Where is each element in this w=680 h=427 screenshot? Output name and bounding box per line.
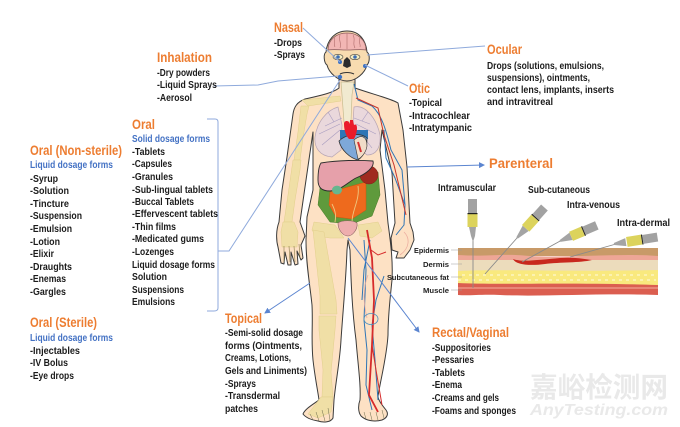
- text block: oral sterile: -Eye drops: [30, 371, 74, 382]
- text block: oral sterile: -Injectables: [30, 346, 80, 357]
- left hand detail: [284, 244, 300, 262]
- connector: inhalation: [214, 76, 338, 86]
- airways: [319, 112, 376, 148]
- blood vessels: blue: [354, 84, 405, 410]
- intestines: orange small bowel: [329, 182, 366, 219]
- text block: oral sterile: -IV Bolus: [30, 358, 68, 369]
- text block: nasal: Nasal: [274, 20, 303, 35]
- bowel folds: [332, 186, 358, 222]
- text block: inhalation: -Liquid Sprays: [157, 80, 217, 91]
- watermark: AnyTesting.com: [529, 402, 668, 419]
- pelvis and left leg bones: [308, 222, 382, 418]
- text block: inhalation: [157, 50, 217, 104]
- heart: [339, 120, 368, 160]
- face: [333, 54, 367, 79]
- text block: ocular: Ocular: [487, 42, 523, 57]
- text block: oral non-sterile: -Syrup: [30, 174, 58, 185]
- text block: ocular: contact lens, implants, inserts: [487, 85, 614, 96]
- liver: [318, 160, 373, 191]
- text block: oral sterile: Liquid dosage forms: [30, 333, 113, 344]
- text block: oral non-sterile: -Lotion: [30, 237, 60, 248]
- text block: oral non-sterile: -Solution: [30, 186, 69, 197]
- text block: oral non-sterile: Oral (Non-sterile): [30, 143, 122, 158]
- text block: inhalation: Inhalation: [157, 50, 212, 65]
- syringe: intra-dermal: [570, 232, 658, 257]
- text block: topical: forms (Ointments,: [225, 341, 302, 352]
- arrow: rectal vaginal: [348, 238, 419, 332]
- text block: rectal vaginal: -Suppositories: [432, 343, 491, 354]
- text block: otic: -Intracochlear: [409, 111, 470, 122]
- text block: oral: Emulsions: [132, 297, 175, 308]
- text block: rectal vaginal: -Creams and gels: [432, 393, 499, 404]
- skin layer labels: Subcutaneous fat: [387, 273, 449, 282]
- text block: oral sterile: [30, 315, 113, 382]
- syringe: intramuscular: [468, 199, 478, 288]
- connector: ocular: [367, 46, 485, 55]
- arrow: parenteral: [407, 165, 484, 167]
- body silhouette: [277, 78, 414, 422]
- skin layer labels: Muscle: [423, 286, 449, 295]
- text block: ocular: and intravitreal: [487, 97, 553, 108]
- knee vessels: [364, 314, 378, 324]
- text block: rectal vaginal: Rectal/Vaginal: [432, 325, 509, 340]
- connector: oral bracket: [207, 80, 340, 311]
- text block: oral: -Tablets: [132, 147, 165, 158]
- connector: nasal: [303, 28, 340, 62]
- text block: topical: -Semi-solid dosage: [225, 328, 304, 339]
- text block: oral non-sterile: -Emulsion: [30, 224, 72, 235]
- arrow: topical: [265, 283, 310, 313]
- skin layer labels: [387, 246, 449, 295]
- text block: ocular: Drops (solutions, emulsions,: [487, 61, 604, 72]
- gallbladder: [332, 186, 342, 194]
- text block: oral: -Buccal Tablets: [132, 197, 194, 208]
- injection type labels: Intra-dermal: [617, 218, 670, 229]
- text block: oral: Oral: [132, 117, 155, 132]
- intestines: green colon: [318, 172, 380, 224]
- skin layer leader lines: [451, 250, 462, 290]
- text block: topical: Creams, Lotions,: [225, 353, 291, 364]
- text block: oral non-sterile: -Gargles: [30, 287, 66, 298]
- text block: oral: [132, 117, 218, 308]
- text block: oral: Solid dosage forms: [132, 134, 210, 145]
- text block: otic: [409, 81, 473, 134]
- text block: nasal: -Drops: [274, 38, 302, 49]
- text block: nasal: -Sprays: [274, 50, 305, 61]
- vein: [513, 258, 592, 265]
- text block: otic: Otic: [409, 81, 430, 96]
- text block: otic: -Intratympanic: [409, 123, 473, 134]
- text block: oral: Liquid dosage forms: [132, 260, 215, 271]
- text block: oral: -Effervescent tablets: [132, 209, 218, 220]
- text block: rectal vaginal: [432, 325, 516, 417]
- skin cross-section with syringes: [387, 183, 670, 296]
- text block: topical: -Transdermal: [225, 391, 280, 402]
- skin layers: [458, 248, 658, 296]
- text block: nasal: [274, 20, 305, 61]
- injection type labels: Sub-cutaneous: [528, 185, 590, 196]
- heading: parenteral: Parenteral: [489, 155, 553, 171]
- text block: inhalation: -Dry powders: [157, 68, 210, 79]
- spleen and stomach: [360, 166, 378, 184]
- text block: oral: -Thin films: [132, 222, 176, 233]
- head: [324, 31, 369, 81]
- skin layer labels: Dermis: [423, 260, 449, 269]
- text block: topical: Gels and Liniments): [225, 366, 307, 377]
- text block: oral sterile: Oral (Sterile): [30, 315, 97, 330]
- skin layer labels: Epidermis: [414, 246, 449, 255]
- text block: topical: patches: [225, 404, 258, 415]
- text block: oral non-sterile: [30, 143, 122, 298]
- text block: otic: -Topical: [409, 98, 442, 109]
- feet detail: [310, 408, 384, 421]
- text block: oral: Suspensions: [132, 285, 184, 296]
- lungs: [315, 107, 380, 157]
- syringe: sub-cutaneous: [485, 204, 548, 274]
- text block: topical: [225, 311, 307, 415]
- text block: rectal vaginal: -Foams and sponges: [432, 406, 516, 417]
- text block: oral: -Medicated gums: [132, 234, 204, 245]
- text block: topical: Topical: [225, 311, 262, 326]
- text block: ocular: [487, 42, 614, 108]
- bladder: [338, 221, 357, 236]
- text block: inhalation: -Aerosol: [157, 93, 192, 104]
- text block: oral non-sterile: -Draughts: [30, 262, 72, 273]
- syringe: intra-venous: [522, 221, 599, 262]
- text block: oral non-sterile: -Suspension: [30, 211, 82, 222]
- skeleton: clavicle and left arm bones: [281, 96, 341, 247]
- injection type labels: Intra-venous: [567, 200, 620, 211]
- brain: [328, 33, 366, 50]
- human body illustration: [277, 31, 414, 422]
- injection type labels: [438, 183, 670, 229]
- text block: oral non-sterile: Liquid dosage forms: [30, 160, 113, 171]
- text block: oral non-sterile: -Tincture: [30, 199, 70, 210]
- injection type labels: Intramuscular: [438, 183, 496, 194]
- text block: ocular: suspensions), ointments,: [487, 73, 590, 84]
- text block: oral: -Sub-lingual tablets: [132, 185, 213, 196]
- blood vessels: red: [356, 98, 406, 215]
- text block: rectal vaginal: -Enema: [432, 380, 463, 391]
- text block: topical: -Sprays: [225, 379, 256, 390]
- text block: rectal vaginal: -Tablets: [432, 368, 465, 379]
- neck and spine: [341, 82, 354, 122]
- connector: otic: [365, 65, 408, 86]
- text block: oral: -Lozenges: [132, 247, 174, 258]
- text block: rectal vaginal: -Pessaries: [432, 355, 474, 366]
- text block: oral non-sterile: -Enemas: [30, 274, 66, 285]
- text block: oral: -Granules: [132, 172, 173, 183]
- text block: oral: Solution: [132, 272, 167, 283]
- watermark: 嘉峪检测网: [530, 365, 668, 405]
- text block: oral: -Capsules: [132, 159, 172, 170]
- text block: oral non-sterile: -Elixir: [30, 249, 54, 260]
